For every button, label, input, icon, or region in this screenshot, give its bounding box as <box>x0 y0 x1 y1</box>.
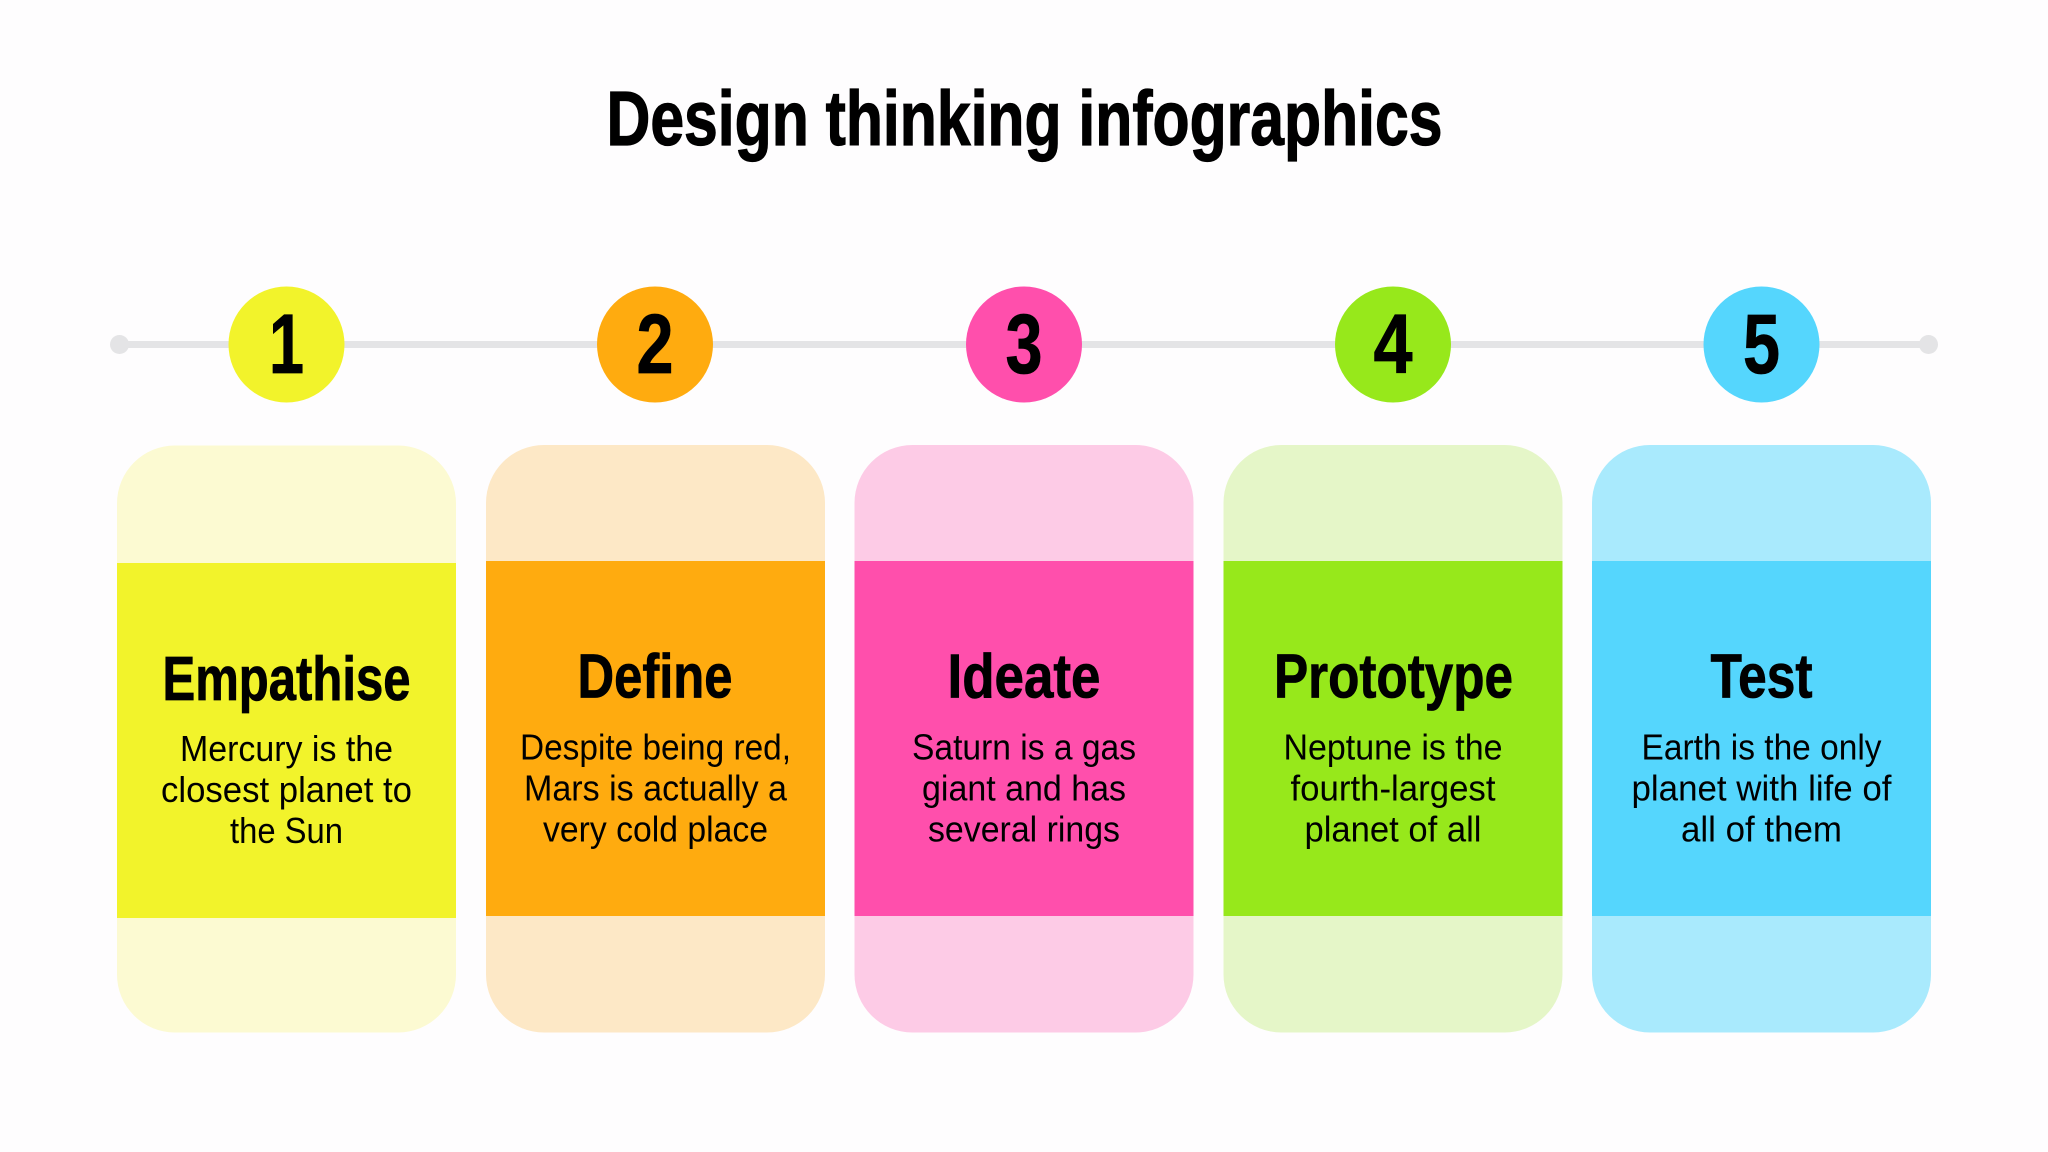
text block: prototype description: planet of all <box>1304 808 1482 850</box>
step 3 number badge: 3 <box>1006 297 1042 391</box>
step 5 number badge <box>1704 286 1820 402</box>
text block: define description: Mars is actually a <box>524 768 788 808</box>
step 1 number badge <box>228 286 344 402</box>
step 4 number badge: 4 <box>1374 297 1413 391</box>
text block: prototype description: fourth-largest <box>1290 768 1496 808</box>
step 1 number badge: 1 <box>269 297 304 391</box>
text block: prototype description <box>1284 726 1502 850</box>
text block: test description: all of them <box>1681 808 1842 850</box>
text block: ideate description: Saturn is a gas <box>912 726 1136 768</box>
text block: test description: planet with life of <box>1632 768 1892 808</box>
text block: prototype description: Neptune is the <box>1284 726 1502 768</box>
text block: test description: Earth is the only <box>1642 726 1882 768</box>
text block: define description <box>520 726 791 850</box>
text block: empathise description: closest planet to <box>161 769 412 810</box>
panel: empathise <box>117 446 456 1032</box>
text block: test description <box>1632 726 1892 850</box>
heading: prototype: Prototype <box>1274 642 1513 712</box>
heading: ideate: Ideate <box>948 642 1100 712</box>
step 5 number badge: 5 <box>1743 297 1780 391</box>
step 2 number badge <box>597 286 713 402</box>
text block: ideate description <box>912 726 1136 850</box>
text block: ideate description: giant and has <box>922 768 1126 808</box>
text block: define description: very cold place <box>543 808 768 850</box>
text block: ideate description: several rings <box>928 808 1120 850</box>
panel: prototype <box>1224 445 1562 1032</box>
panel: define <box>486 445 825 1032</box>
text block: empathise description <box>161 728 412 851</box>
panel: ideate <box>854 445 1194 1032</box>
step 3 number badge <box>966 286 1082 402</box>
title: Design thinking infographics <box>606 76 1442 162</box>
text block: empathise description: Mercury is the <box>180 728 393 769</box>
step 2 number badge: 2 <box>636 297 674 391</box>
heading: test: Test <box>1710 642 1812 712</box>
heading: define: Define <box>578 642 732 712</box>
text block: empathise description: the Sun <box>230 810 343 851</box>
heading: empathise: Empathise <box>162 645 410 714</box>
step 4 number badge <box>1335 286 1451 402</box>
timeline connector line <box>110 335 1938 354</box>
panel: test <box>1592 445 1931 1032</box>
text block: define description: Despite being red, <box>520 726 791 768</box>
